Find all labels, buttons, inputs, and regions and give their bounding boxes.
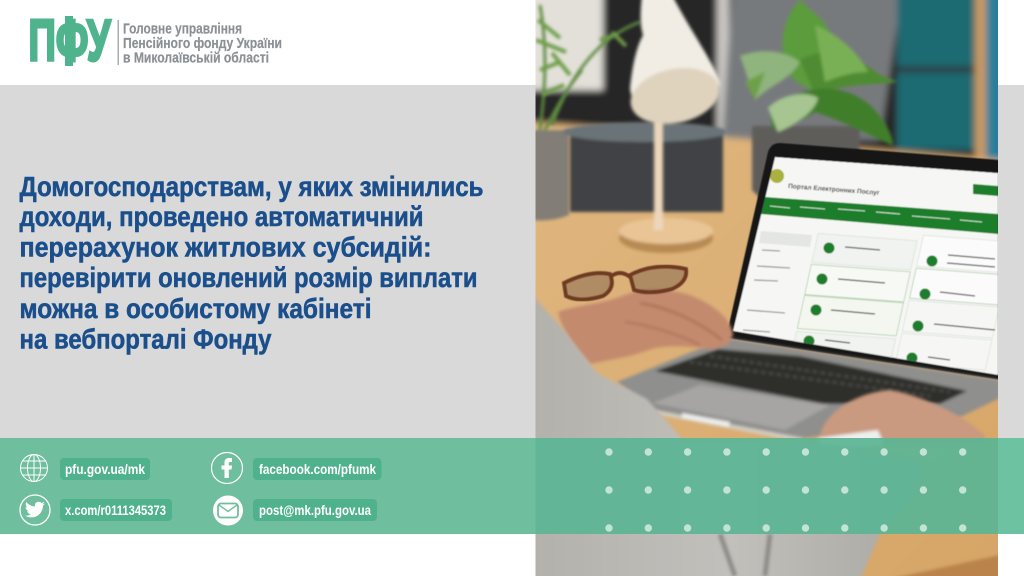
- icon: globe: [20, 454, 48, 482]
- facebook pill: facebook.com/pfumk: [259, 462, 376, 477]
- main heading: доходи, проведено автоматичний: [20, 201, 424, 232]
- main heading: [20, 171, 484, 354]
- green contacts band: [0, 438, 1024, 534]
- email pill: post@mk.pfu.gov.ua: [259, 503, 371, 518]
- portal logo: [770, 169, 784, 183]
- portal navigation bar: [761, 197, 998, 234]
- icon: facebook: [212, 452, 242, 484]
- dark speaker box: [563, 122, 727, 212]
- main heading: Домогосподарствам, у яких змінились: [20, 171, 484, 202]
- portal sidebar active item: [759, 231, 812, 247]
- x.com pill: [60, 499, 172, 521]
- shirt sleeve: [533, 296, 1000, 576]
- left plant and pot: [533, 5, 640, 220]
- main heading: можна в особистому кабінеті: [20, 293, 372, 324]
- portal title: Портал Електронних Послуг: [788, 183, 880, 197]
- organisation name: Пенсійного фонду України: [123, 36, 282, 52]
- photo: laptop on a desk: [530, 0, 1013, 576]
- portal placeholder text: [743, 247, 995, 360]
- main heading: перерахунок житлових субсидій:: [20, 232, 432, 262]
- laptop base: [617, 338, 1000, 442]
- portal nav labels: [770, 206, 982, 222]
- email pill: [253, 499, 377, 521]
- x.com pill: x.com/r0111345373: [65, 503, 166, 518]
- keyboard key texture: [690, 356, 950, 396]
- organisation name: [123, 22, 282, 66]
- organisation name: в Миколаївській області: [123, 50, 269, 66]
- website pill: pfu.gov.ua/mk: [65, 462, 145, 477]
- decorative dot grid: [605, 448, 966, 532]
- trackpad: [653, 385, 830, 430]
- logo: PFU: [28, 8, 111, 74]
- facebook pill: [253, 458, 382, 480]
- icon: mail: [213, 496, 243, 526]
- logo divider: [118, 20, 119, 65]
- main heading: перевірити оновлений розмір виплати: [20, 262, 478, 293]
- eyeglasses: [564, 267, 686, 300]
- screen page: [733, 157, 1013, 376]
- main heading: на вебпорталі Фонду: [20, 324, 272, 354]
- portal cards: [794, 232, 998, 370]
- grey title panel: [0, 85, 1024, 438]
- left hand: [558, 289, 733, 364]
- laptop screen: [726, 143, 1013, 380]
- right hand and cuff: [818, 390, 985, 450]
- icon: twitter: [20, 495, 50, 525]
- desk lamp: [619, 0, 725, 253]
- portal login button: [973, 184, 998, 196]
- logo: PFU: ПФУ: [28, 8, 111, 74]
- organisation name: Головне управління: [123, 22, 242, 38]
- screen bezel: [726, 143, 1000, 380]
- keyboard: [655, 349, 967, 404]
- portal card icons: [804, 242, 938, 364]
- website pill: [60, 458, 150, 480]
- photo background: [530, 0, 1005, 576]
- potted plant: [740, 0, 898, 210]
